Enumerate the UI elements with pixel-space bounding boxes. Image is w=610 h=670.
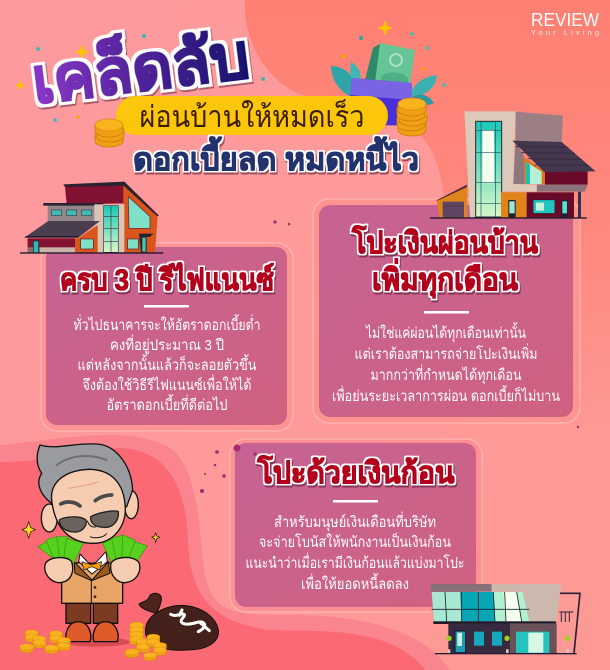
heading: lump sum: โปะด้วยเงินก้อน	[257, 454, 455, 490]
text block: lump sum: เพื่อให้ยอดหนี้ลดลง	[301, 573, 409, 593]
coins right	[125, 622, 167, 661]
text block: lump sum	[246, 511, 464, 593]
heading: refinance: ครบ 3 ปี รีไฟแนนซ์	[60, 262, 274, 297]
glasses	[59, 511, 118, 532]
illustration: house top left	[20, 182, 163, 254]
text block: refinance: อัตราดอกเบี้ยที่ดีต่อไป	[106, 394, 228, 414]
text block: extra monthly payment	[332, 322, 560, 405]
vest and tie	[74, 562, 110, 581]
coins left	[20, 630, 71, 654]
text block: lump sum: สำหรับมนุษย์เงินเดือนที่บริษัท	[274, 511, 436, 532]
face	[52, 469, 125, 543]
heading: เคล็ดลับ: เคล็ดลับ	[28, 18, 253, 117]
text block: extra monthly payment: แต่เราต้องสามารถจ่ายโปะเงินเพิ่ม	[354, 343, 538, 363]
subtitle line 2: ดอกเบี้ยลด หมดหนี้ไว	[133, 136, 419, 177]
legs	[62, 563, 123, 642]
text block: lump sum: จะจ่ายโบนัสให้พนักงานเป็นเงินก้อน	[259, 532, 451, 551]
illustration: house bottom right	[431, 584, 580, 654]
text block: refinance: ทั่วไปธนาคารจะให้อัตราดอกเบี้ยต่ำ	[74, 314, 260, 334]
logo: Review Your Living: REVIEW	[531, 10, 599, 30]
icon: coin stack right	[397, 98, 427, 136]
icon: coin stack left	[95, 119, 124, 147]
panel: refinance	[41, 243, 293, 431]
sparkle decorations	[14, 20, 446, 122]
logo: Review Your Living: Your Living	[531, 28, 599, 37]
ears	[41, 491, 138, 532]
hair	[37, 444, 133, 507]
hands	[45, 557, 140, 583]
heading: extra monthly payment	[351, 224, 538, 299]
decorative dots	[200, 220, 579, 493]
subtitle pill: ผ่อนบ้านให้หมดเร็ว	[140, 98, 364, 134]
sparkles	[22, 522, 160, 543]
panel: lump sum	[230, 439, 482, 612]
title: headline	[14, 18, 446, 177]
dollar sign	[171, 610, 209, 632]
text block: extra monthly payment: มากกว่าที่กำหนดได้ทุกเดือน	[370, 364, 522, 385]
shadow	[63, 637, 130, 647]
text block: lump sum: แนะนำว่าเมื่อเรามีเงินก้อนแล้วแบ่งมาโปะ	[246, 552, 464, 572]
illustration: man with money	[20, 444, 219, 661]
heading: extra monthly payment: โปะเงินผ่อนบ้าน	[351, 224, 538, 260]
panel: extra monthly payment	[313, 199, 580, 423]
text block: refinance: แต่หลังจากนั้นแล้วก็จะลอยตัวขึ้น	[78, 354, 256, 374]
money right	[103, 535, 147, 563]
money left	[38, 537, 83, 564]
icon: money pouch with leaves	[331, 43, 437, 126]
illustration: house top right	[430, 111, 596, 219]
text block: refinance: จึงต้องใช้วิธีรีไฟแนนซ์เพื่อให้ได้	[82, 374, 252, 394]
text block: extra monthly payment: เพื่อย่นระยะเวลาการผ่อน ดอกเบี้ยก็ไม่บาน	[332, 385, 560, 405]
text block: refinance	[74, 314, 260, 414]
text block: refinance: คงที่อยู่ประมาณ 3 ปี	[110, 334, 224, 354]
text block: extra monthly payment: ไม่ใช่แค่ผ่อนได้ทุกเดือนเท่านั้น	[365, 322, 526, 343]
money bag	[139, 593, 219, 650]
brows	[61, 495, 112, 506]
heading: extra monthly payment: เพิ่มทุกเดือน	[372, 258, 518, 299]
